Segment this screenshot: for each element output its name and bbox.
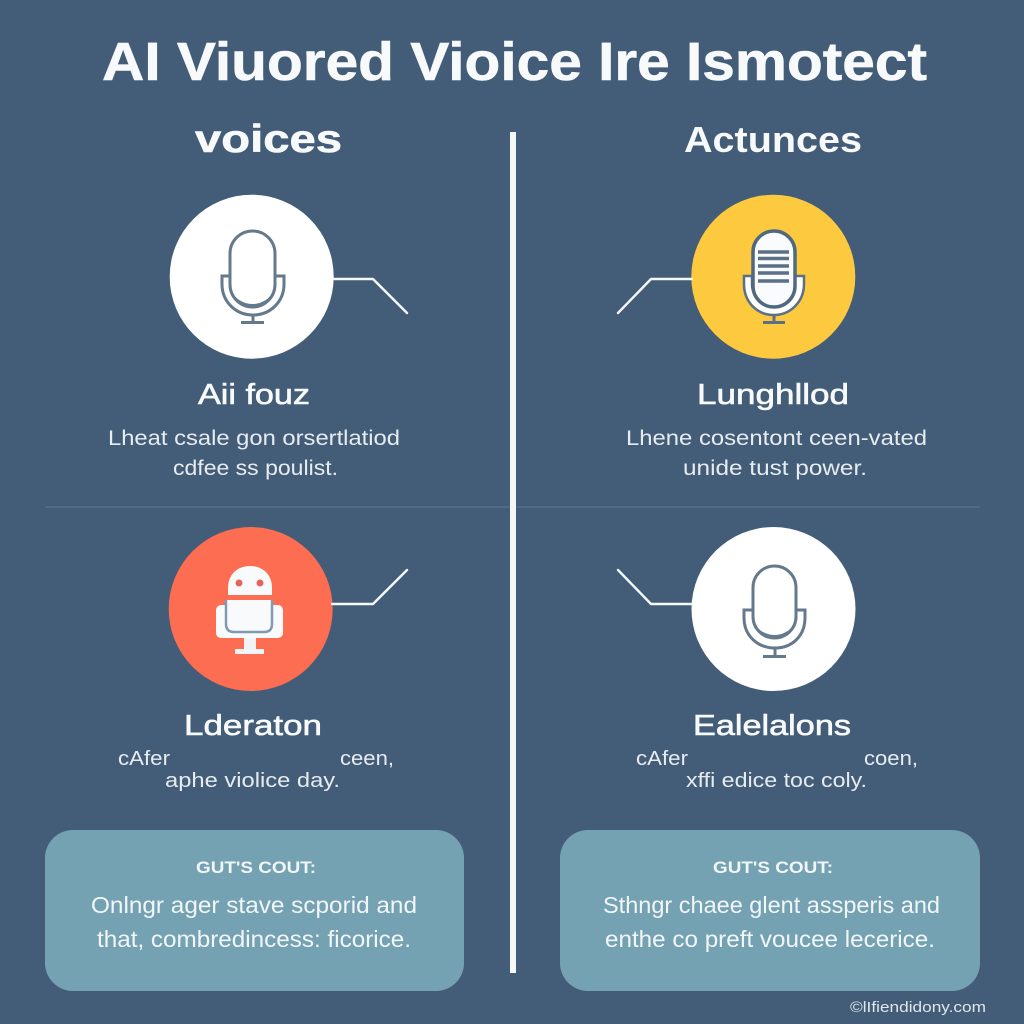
text block: bottom right: coen, xyxy=(864,748,918,770)
panel: right callout: GUT'S COUT: xyxy=(713,858,833,877)
text block: bottom right: cAfer xyxy=(636,748,688,770)
icon: white microphone outline xyxy=(692,527,856,691)
title: AI Viuored Vioice Ire Ismotect xyxy=(102,32,927,92)
text block: bottom left: cAfer xyxy=(118,748,170,770)
panel: left callout: that, combredincess: ficorice. xyxy=(97,926,411,952)
center divider xyxy=(510,132,516,973)
text block: top right xyxy=(626,427,927,480)
text block: top right: Lhene cosentont ceen-vated xyxy=(626,427,927,450)
panel: left callout: GUT'S COUT: xyxy=(196,858,316,877)
panel: left callout xyxy=(45,830,464,991)
label: Ealelalons: Ealelalons xyxy=(693,710,851,742)
panel: right callout: Sthngr chaee glent assperis and xyxy=(603,892,940,918)
icon: white microphone xyxy=(170,195,334,359)
right column heading: Actunces xyxy=(684,119,862,160)
label: Lderaton: Lderaton xyxy=(184,710,322,742)
connector: bottom right xyxy=(618,570,692,604)
text block: bottom right xyxy=(636,748,918,792)
left column heading: voices xyxy=(195,118,342,161)
connector: top right xyxy=(618,279,692,313)
footer credit: ©lIfiendidony.com xyxy=(850,999,986,1016)
connector: bottom left xyxy=(332,570,407,604)
text block: top left: cdfee ss poulist. xyxy=(173,457,338,480)
panel: left callout: Onlngr ager stave scporid and xyxy=(91,892,417,918)
text block: bottom left: aphe violice day. xyxy=(165,770,340,792)
label: Lunghllod: Lunghllod xyxy=(697,379,849,411)
text block: top left xyxy=(108,427,400,480)
text block: top right: unide tust power. xyxy=(683,457,867,480)
text block: bottom right: xffi edice toc coly. xyxy=(686,770,867,792)
panel: right callout xyxy=(560,830,980,991)
text block: bottom left xyxy=(118,748,394,792)
connector: top left xyxy=(333,279,407,313)
text block: bottom left: ceen, xyxy=(340,748,394,770)
icon: red robot xyxy=(169,527,333,691)
panel: right callout: enthe co preft voucee lecerice. xyxy=(605,926,935,952)
icon: yellow microphone xyxy=(691,195,855,359)
text block: top left: Lheat csale gon orsertlatiod xyxy=(108,427,400,450)
label: Aii fouz: Aii fouz xyxy=(198,379,310,411)
